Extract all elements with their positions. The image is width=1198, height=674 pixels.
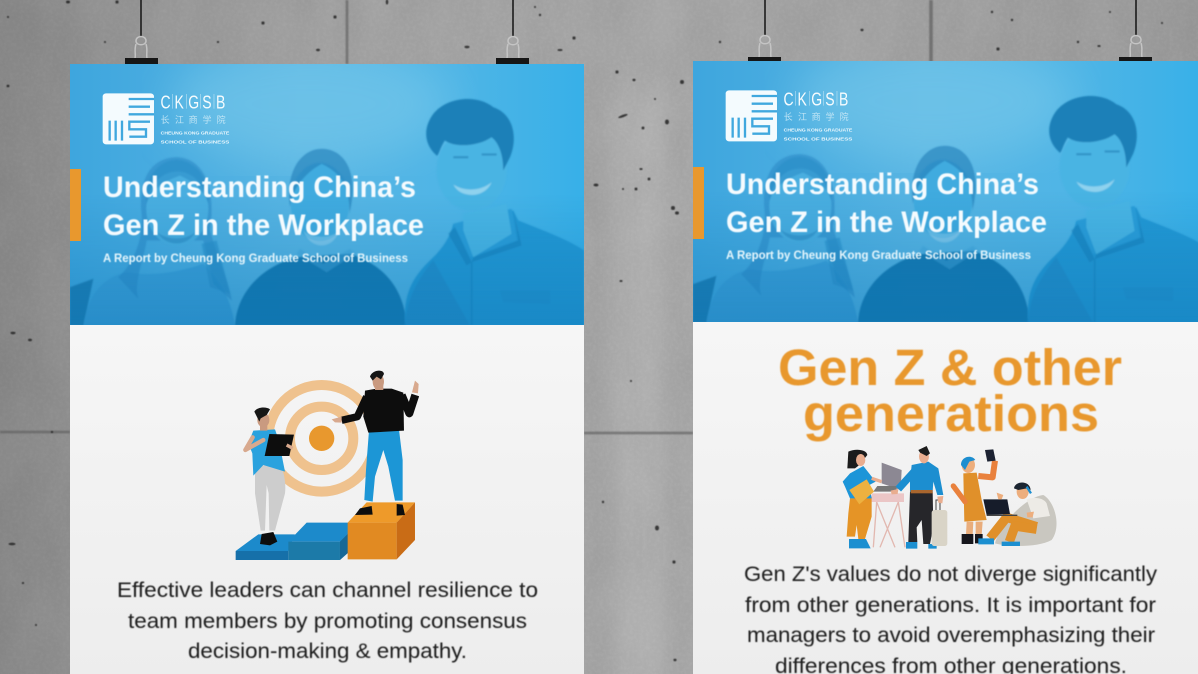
poster 1 body text: team members by promoting consensus <box>128 610 527 633</box>
poster 1 title: Gen Z in the Workplace <box>103 209 424 242</box>
poster 2 body text: Gen Z's values do not diverge significantly <box>744 563 1158 586</box>
poster 1 body panel <box>70 325 584 674</box>
poster 1 orange accent bar <box>70 169 81 241</box>
poster 2 body text: from other generations. It is important for <box>745 594 1156 617</box>
poster 2 logo: SCHOOL OF BUSINESS <box>784 137 852 142</box>
person gesturing <box>332 371 419 516</box>
poster 2 logo: CHEUNG KONG GRADUATE <box>784 127 852 132</box>
man with suitcase <box>891 446 947 549</box>
poster 2 body panel <box>693 322 1198 674</box>
poster 2 title: Understanding China’s <box>726 168 1039 201</box>
poster 1 body text: decision-making & empathy. <box>188 640 467 663</box>
hanging clip 1 <box>125 0 158 64</box>
poster 1 body text <box>117 579 538 663</box>
poster 2 body text <box>744 563 1158 674</box>
poster 2 <box>693 41 1198 674</box>
poster 2 title <box>726 168 1047 239</box>
poster 1 logo <box>103 92 229 145</box>
poster 2 heading <box>778 339 1122 442</box>
illustration: leaders around a target on steps <box>236 371 419 560</box>
target rings <box>268 385 375 492</box>
poster 2 body text: managers to avoid overemphasizing their <box>747 624 1155 647</box>
poster 1 title <box>103 171 424 242</box>
poster 1 title: Understanding China’s <box>103 171 416 204</box>
hanging clip 3 <box>748 0 781 63</box>
poster 1 header photo band <box>70 44 584 325</box>
poster 2 heading: generations <box>803 385 1099 442</box>
hanging clip 2 <box>496 0 529 64</box>
step blocks <box>236 502 415 560</box>
poster 1 logo: SCHOOL OF BUSINESS <box>161 140 229 145</box>
illustration: four Gen Z colleagues <box>843 446 1057 549</box>
poster 2 logo: CKGSB <box>783 89 848 110</box>
poster 2 logo <box>726 89 852 142</box>
poster 1 subtitle: A Report by Cheung Kong Graduate School of Business <box>103 253 408 265</box>
poster 2 logo: 长江商学院 <box>784 111 849 122</box>
man sitting on beanbag with laptop <box>978 483 1057 546</box>
person with tablet <box>245 408 294 545</box>
poster 1 logo: CKGSB <box>160 92 225 113</box>
poster 2 header photo band <box>693 41 1198 322</box>
poster 2 subtitle: A Report by Cheung Kong Graduate School of Business <box>726 250 1031 262</box>
poster 2 title: Gen Z in the Workplace <box>726 206 1047 239</box>
poster 1 <box>70 44 584 674</box>
poster 2 orange accent bar <box>693 167 704 239</box>
hanging clip 4 <box>1119 0 1152 63</box>
desk with computer <box>872 463 905 547</box>
poster 1 logo: 长江商学院 <box>161 114 226 125</box>
poster 1 logo: CHEUNG KONG GRADUATE <box>161 130 229 135</box>
girl in orange apron with phone <box>953 449 996 544</box>
woman with folder <box>843 450 882 548</box>
poster 2 heading: Gen Z & other <box>778 339 1122 396</box>
poster 1 body text: Effective leaders can channel resilience to <box>117 579 538 602</box>
